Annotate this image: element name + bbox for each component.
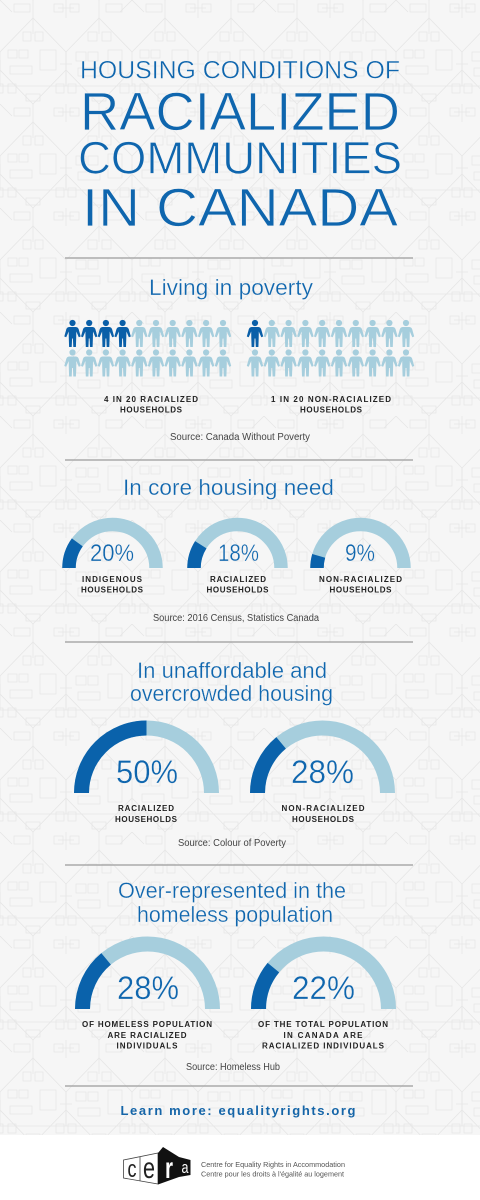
gauge: 28% non-racialized households: HOUSEHOLDS — [292, 815, 355, 824]
gauge: 28% non-racialized households — [258, 728, 388, 824]
gauge: 20% indigenous households: 20% — [90, 540, 134, 567]
panel: unaffordable and overcrowded housing — [82, 658, 388, 849]
label: 1 in 20 non-racialized households: 1 IN 20 NON-RACIALIZED — [271, 395, 391, 404]
label: 1 in 20 non-racialized households: HOUSEHOLDS — [300, 406, 363, 414]
gauge: 20% indigenous households: HOUSEHOLDS — [81, 586, 144, 594]
title: IN CANADA — [82, 178, 398, 238]
gauge: 9% non-racialized households: HOUSEHOLDS — [330, 586, 392, 594]
pictogram: 4 in 20 racialized households — [64, 320, 231, 376]
heading: unaffordable and overcrowded housing — [130, 658, 333, 706]
organization name: Centre for Equality Rights in Accommodation — [201, 1160, 345, 1169]
title: COMMUNITIES — [78, 132, 402, 184]
gauge: 22% of total population: RACIALIZED INDIVIDUALS — [262, 1042, 385, 1050]
panel: living in poverty — [64, 275, 414, 443]
source: Canada Without Poverty: Source: Canada Without Poverty — [170, 432, 310, 443]
gauge: 22% of total population: IN CANADA ARE — [284, 1031, 363, 1040]
title — [78, 56, 402, 238]
heading: over-represented in the homeless population: homeless population — [137, 902, 333, 927]
label: 4 in 20 racialized households — [104, 395, 198, 414]
gauge: 28% of homeless population — [82, 944, 212, 1050]
organization name: Centre pour les droits à l'égalité au logement — [201, 1170, 345, 1178]
heading: over-represented in the homeless population — [118, 878, 346, 927]
heading: living in poverty: Living in poverty — [149, 275, 313, 300]
gauge: 18% racialized households — [194, 524, 281, 594]
panel: in core housing need — [69, 475, 404, 624]
gauge: 50% racialized households — [82, 728, 212, 824]
organization name — [201, 1160, 345, 1178]
gauge: 22% of total population — [258, 944, 388, 1050]
icon: CERA mark: r — [165, 1152, 173, 1185]
gauge: 9% non-racialized households: NON-RACIALIZED — [319, 575, 402, 584]
heading: unaffordable and overcrowded housing: overcrowded housing — [130, 681, 333, 706]
gauge: 50% racialized households: HOUSEHOLDS — [115, 815, 178, 824]
gauge: 18% racialized households: 18% — [218, 540, 259, 567]
label: 4 in 20 racialized households: 4 IN 20 RACIALIZED — [104, 395, 198, 404]
gauge: 22% of total population: OF THE TOTAL POPULATION — [258, 1020, 388, 1029]
gauge: 28% of homeless population: INDIVIDUALS — [116, 1042, 178, 1050]
gauge: 18% racialized households: RACIALIZED — [210, 575, 266, 584]
logo: CERA — [124, 1147, 345, 1185]
gauge: 28% of homeless population: OF HOMELESS POPULATION — [82, 1020, 212, 1029]
gauge: 9% non-racialized households — [317, 524, 404, 594]
gauge: 50% racialized households: RACIALIZED — [118, 804, 174, 813]
gauge: 9% non-racialized households: 9% — [345, 540, 375, 567]
label: 1 in 20 non-racialized households — [271, 395, 391, 414]
heading: unaffordable and overcrowded housing: In unaffordable and — [137, 658, 327, 683]
panel: over-represented in the homeless population — [82, 878, 388, 1073]
icon: CERA mark: e — [143, 1152, 155, 1185]
icon: CERA mark: a — [182, 1158, 189, 1177]
gauge: 20% indigenous households — [69, 524, 156, 594]
gauge: 28% non-racialized households: 28% — [291, 754, 354, 790]
gauge: 20% indigenous households: INDIGENOUS — [82, 575, 143, 584]
icon: CERA mark: c — [128, 1156, 136, 1183]
gauge: 28% non-racialized households: NON-RACIALIZED — [282, 804, 365, 813]
source: Homeless Hub: Source: Homeless Hub — [186, 1062, 280, 1073]
title: HOUSING CONDITIONS OF — [80, 56, 400, 84]
gauge: 50% racialized households: 50% — [116, 754, 178, 790]
gauge: 28% of homeless population: 28% — [117, 970, 179, 1006]
source: Colour of Poverty: Source: Colour of Poverty — [178, 838, 286, 849]
heading: over-represented in the homeless population: Over-represented in the — [118, 878, 346, 903]
pictogram: 1 in 20 non-racialized households — [247, 320, 414, 376]
source: 2016 Census: Source: 2016 Census, Statistics Canada — [153, 613, 319, 624]
icon: CERA mark — [124, 1147, 190, 1185]
label: 4 in 20 racialized households: HOUSEHOLDS — [120, 406, 183, 414]
gauge: 18% racialized households: HOUSEHOLDS — [206, 586, 269, 594]
gauge: 28% of homeless population: ARE RACIALIZED — [108, 1031, 187, 1040]
title: RACIALIZED — [80, 82, 400, 142]
call to action: learn more: Learn more: equalityrights.org — [120, 1103, 356, 1118]
heading: in core housing need: In core housing need — [123, 475, 334, 500]
gauge: 22% of total population: 22% — [292, 970, 355, 1006]
